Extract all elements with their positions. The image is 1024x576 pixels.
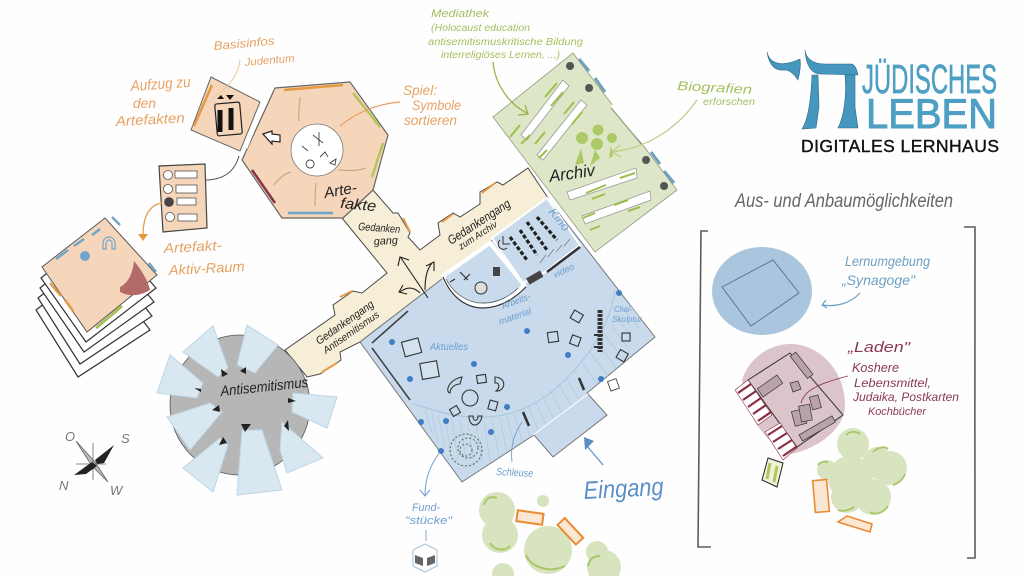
- blob: Synagoge learning environment: [712, 247, 812, 335]
- icon: elevator: [215, 95, 242, 136]
- label: Lernumgebung Synagoge: Lernumgebung: [845, 253, 930, 269]
- labels: artefakte annotations: Aktiv-Raum: [167, 258, 245, 278]
- labels: artefakte annotations: Basisinfos: [213, 34, 275, 53]
- labels: biografien: erforschen: [703, 97, 755, 108]
- labels: corridor: Gedankengang: [314, 298, 377, 347]
- icon: compass rose: [59, 429, 130, 498]
- icon: compass rose: O: [65, 429, 75, 444]
- logo: Jüdisches Leben: LEBEN: [866, 90, 997, 137]
- label: Eingang: Eingang: [583, 473, 664, 505]
- label: Laden: Kochbücher: [868, 406, 927, 418]
- labels: exhibition room: material: [497, 306, 534, 328]
- benches: [813, 479, 872, 532]
- icon: plant: [450, 434, 482, 466]
- label: Artefakte: fakte: [340, 195, 377, 215]
- awnings: [735, 380, 797, 460]
- labels: corridor: Antisemitismus: [321, 310, 382, 357]
- label: Artefakte: [322, 179, 377, 215]
- panel: archive room: [493, 53, 677, 252]
- labels: exhibition room: Skulptur: [612, 314, 643, 324]
- labels: mediathek: interreligiöses Lernen, ...): [441, 50, 560, 61]
- trees: entrance garden: [479, 492, 621, 576]
- label: Fundstücke: Fund-: [412, 502, 440, 514]
- labels: exhibition room: Schleuse: [496, 466, 534, 480]
- panel: artefakte hexagon: [242, 82, 388, 218]
- label: Antisemitismus: Antisemitismus: [219, 375, 309, 400]
- labels: exhibition room: Arbeits-: [499, 291, 532, 312]
- label: Fundstücke: [405, 502, 453, 527]
- icon: compass rose: N: [59, 478, 69, 493]
- labels: exhibition room: Kino: [546, 206, 572, 234]
- arrow: mediathek to shelves: [493, 62, 528, 115]
- labels: corridor: Gedankengang: [445, 197, 513, 248]
- arrow: Spiel to circle: [340, 102, 400, 126]
- labels: artefakte annotations: Spiel:: [403, 82, 437, 98]
- label: Artefakte: Arte-: [322, 179, 358, 202]
- labels: artefakte annotations: Artefakt-: [162, 237, 222, 256]
- labels: exhibition room: Chai-: [614, 304, 632, 314]
- arrow: Fundstücke: [420, 452, 440, 496]
- labels: artefakte annotations: [114, 34, 461, 278]
- labels: exhibition room: Aktuelles: [429, 341, 469, 353]
- labels: corridor: [314, 197, 513, 357]
- label: Fundstücke: "stücke": [405, 515, 453, 527]
- labels: corridor: gang: [374, 235, 399, 248]
- icons: seats and tables: [401, 310, 630, 425]
- arrows from centre: [274, 97, 366, 206]
- arrow: panel to elevator: [205, 156, 239, 180]
- panel: elevator room: [191, 77, 262, 151]
- arrow: biografien to people: [612, 100, 697, 157]
- icon: people biographies: [575, 124, 617, 166]
- panel: main exhibition room: [360, 198, 655, 482]
- fridge: [762, 458, 783, 487]
- arrow: Laden to shelves: [801, 376, 848, 403]
- label: Lernumgebung Synagoge: [841, 253, 930, 288]
- arrow: schleuse: [512, 422, 522, 462]
- labels: mediathek: antisemitismuskritische Bildung: [428, 37, 583, 48]
- icon: QR cube: [413, 530, 437, 572]
- panel: elevator button panel: [159, 164, 207, 232]
- arrow: panel to active room: [138, 203, 162, 241]
- label: Laden: Lebensmittel,: [854, 376, 931, 390]
- shop furniture: [757, 352, 835, 441]
- panel: corridors Gedankengang: [285, 168, 548, 377]
- heading: Aus- und Anbaumöglichkeiten: Aus- und Anbaumöglichkeiten: [734, 191, 953, 212]
- icon: compass rose: W: [110, 483, 124, 498]
- labels: biografien: [677, 78, 755, 108]
- labels: corridor: zum Archiv: [456, 219, 501, 253]
- label: Laden: Judaika, Postkarten: [852, 390, 959, 404]
- icon: symbols circle: [291, 124, 343, 176]
- orange corridor markers: [322, 183, 495, 372]
- trees: shop garden: [813, 428, 907, 532]
- label: Lernumgebung Synagoge: „Synagoge": [841, 272, 916, 288]
- label: Laden: „Laden": [847, 339, 911, 356]
- panel: antisemitismus round room: [157, 325, 337, 495]
- labels: artefakte annotations: Aufzug zu: [129, 74, 192, 95]
- benches: [516, 510, 583, 545]
- labels: biografien: Biografien: [677, 78, 753, 97]
- logo: Jüdisches Leben: DIGITALES LERNHAUS: [801, 136, 999, 156]
- blob: Laden shop: [735, 344, 845, 487]
- labels: artefakte annotations: den: [133, 95, 156, 111]
- labels: artefakte annotations: Symbole: [412, 97, 461, 113]
- kino room: [492, 198, 580, 283]
- labels: corridor: Gedanken: [358, 221, 401, 236]
- labels: exhibition room: video: [552, 261, 576, 280]
- arrow: Eingang: [584, 437, 603, 465]
- panel: artefakt aktiv-raum page stack: [36, 217, 157, 377]
- labels: mediathek: Mediathek: [431, 8, 490, 20]
- labels: mediathek: (Holocaust education: [431, 23, 530, 34]
- labels: artefakte annotations: Judentum: [243, 53, 295, 69]
- inner round room: [443, 243, 524, 306]
- label: Laden: [847, 339, 959, 418]
- arrow: to synagogue: [822, 293, 860, 308]
- labels: mediathek: [428, 8, 583, 61]
- arrow: to elevator from Basisinfos: [212, 60, 240, 98]
- shelves: [521, 80, 651, 224]
- arrows: corridor directions: [398, 257, 434, 298]
- labels: artefakte annotations: sortieren: [404, 112, 457, 128]
- markers: [389, 290, 622, 454]
- label: Archiv: Archiv: [547, 161, 598, 186]
- labels: artefakte annotations: Artefakten: [114, 109, 185, 129]
- icon: compass rose: S: [121, 431, 130, 446]
- label: Laden: Koshere: [852, 360, 899, 375]
- icon: chet letter: [767, 50, 858, 129]
- logo: Jüdisches Leben: [767, 50, 999, 156]
- panel: brackets: [698, 227, 975, 558]
- labels: exhibition room: [429, 206, 643, 480]
